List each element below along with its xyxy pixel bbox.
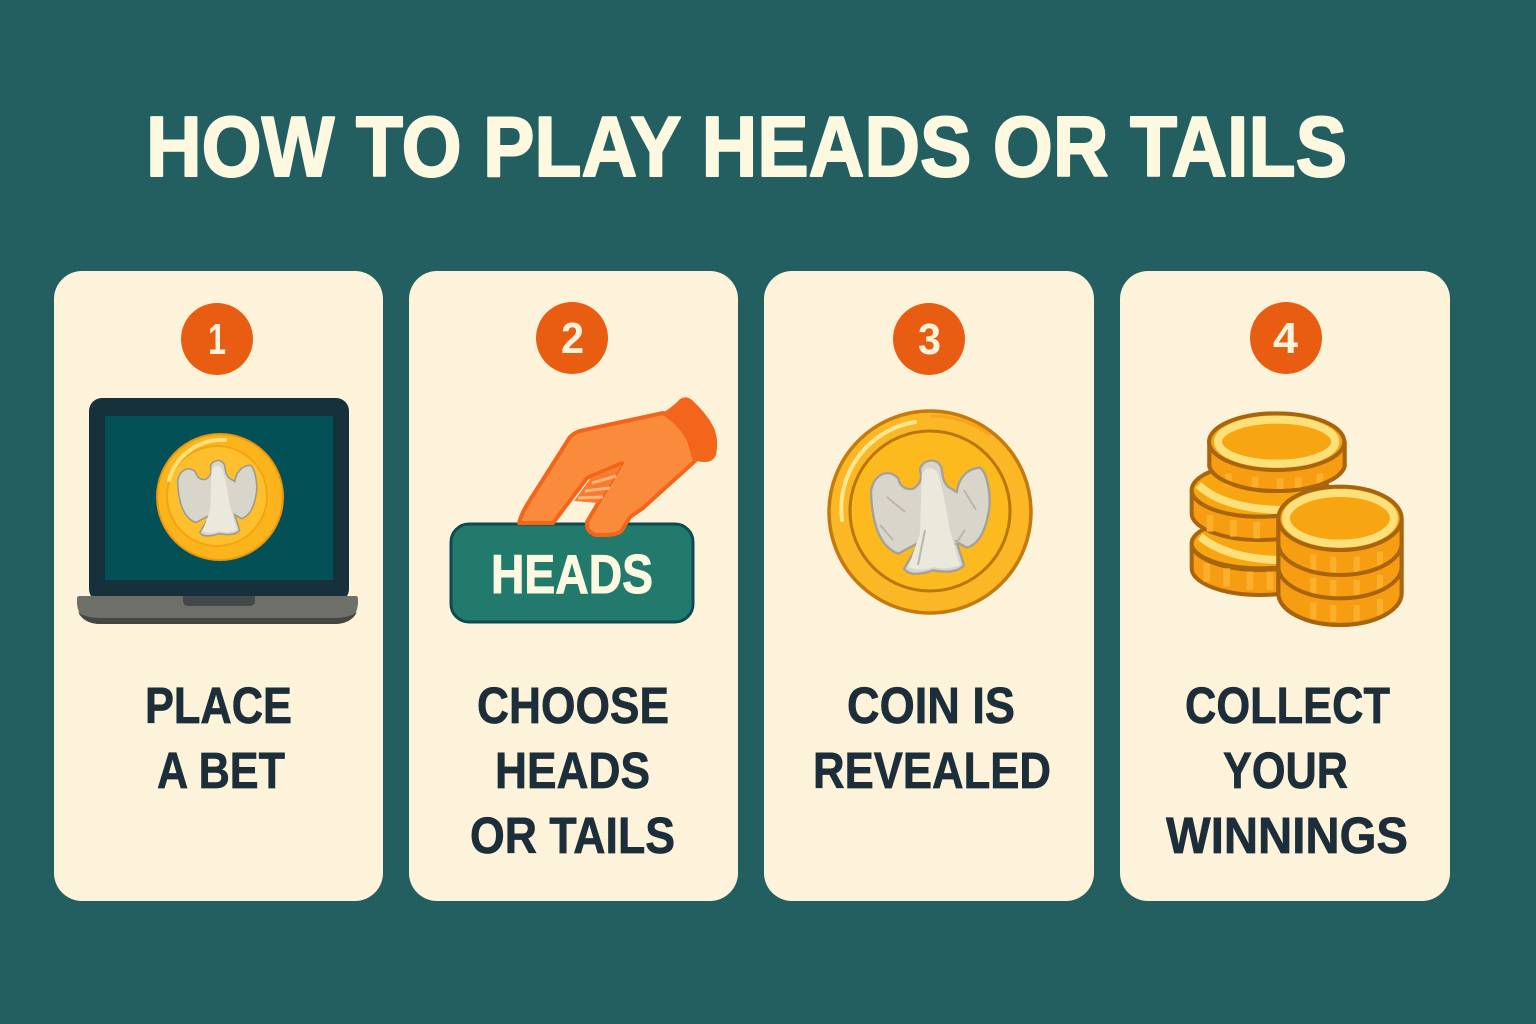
icon: coin stacks bbox=[1192, 413, 1402, 625]
card 4 background bbox=[1120, 271, 1450, 901]
hand bbox=[519, 397, 717, 535]
icon: hand pressing heads button bbox=[451, 397, 717, 622]
panel: step 2 choose heads or tails bbox=[409, 271, 738, 901]
card 1 background bbox=[54, 271, 383, 901]
step 4 badge bbox=[1250, 302, 1322, 374]
panel: step 1 place a bet bbox=[54, 271, 383, 901]
step 1 badge bbox=[181, 303, 253, 375]
panel: step 4 collect your winnings bbox=[1120, 271, 1450, 901]
heads button: HEADS bbox=[491, 543, 653, 605]
step 2 label: CHOOSE bbox=[477, 677, 669, 734]
panel: step 3 coin is revealed bbox=[764, 271, 1094, 901]
step 2 label: HEADS bbox=[495, 742, 650, 799]
step 2 label bbox=[470, 677, 675, 864]
step 4 label: YOUR bbox=[1223, 742, 1348, 799]
card 2 background bbox=[409, 271, 738, 901]
step 1 badge: 1 bbox=[208, 315, 226, 364]
step 2 badge: 2 bbox=[561, 314, 584, 363]
step 2 badge bbox=[536, 302, 608, 374]
step 3 label bbox=[813, 677, 1051, 799]
step 1 label bbox=[145, 677, 292, 799]
step 3 label: REVEALED bbox=[813, 742, 1051, 799]
icon: laptop with coin bbox=[77, 398, 358, 624]
step 1 label: A BET bbox=[157, 742, 285, 799]
card 3 background bbox=[764, 271, 1094, 901]
step 3 label: COIN IS bbox=[847, 677, 1015, 734]
step 3 badge: 3 bbox=[918, 315, 941, 364]
step 4 badge: 4 bbox=[1273, 314, 1299, 363]
step 2 label: OR TAILS bbox=[470, 807, 675, 864]
step 4 label: WINNINGS bbox=[1166, 807, 1408, 864]
step 4 label bbox=[1166, 677, 1408, 864]
title: HOW TO PLAY HEADS OR TAILS bbox=[146, 100, 1347, 195]
step 1 label: PLACE bbox=[145, 677, 292, 734]
heads button bbox=[451, 524, 693, 622]
step 3 badge bbox=[893, 303, 965, 375]
icon: gold coin bbox=[829, 411, 1031, 613]
step 4 label: COLLECT bbox=[1185, 677, 1390, 734]
